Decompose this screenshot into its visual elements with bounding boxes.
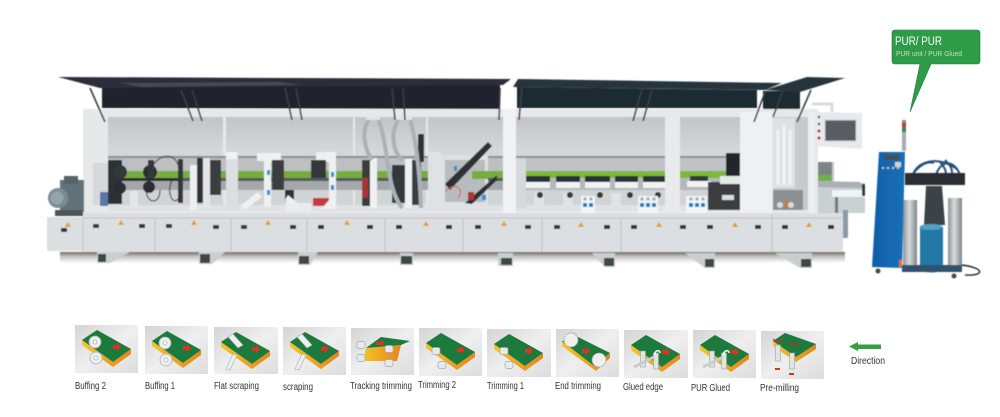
- process step: Glued edge: Glued edge: [623, 382, 663, 393]
- direction label: Direction: [851, 355, 885, 367]
- interior section 7: [773, 117, 808, 210]
- hoses: [908, 160, 960, 185]
- unit: flat scraping stations: [226, 152, 336, 212]
- cabinet base left block: [47, 217, 83, 251]
- callout title: PUR/ PUR: [895, 36, 942, 48]
- pillar centre: [665, 116, 680, 212]
- blue control cabinet: [872, 152, 905, 268]
- air gauge box 3: [686, 196, 707, 213]
- interior section 5: [516, 117, 665, 210]
- process step: Tracking trimming: Tracking trimming: [350, 381, 412, 392]
- process step: Trimming 2: [418, 328, 482, 391]
- right guard: [843, 210, 848, 238]
- process step: Buffing 1: [145, 326, 208, 392]
- process step: Pre-milling: Pre-milling: [760, 383, 799, 394]
- lid gas struts: [90, 87, 811, 122]
- process step: PUR Glued: [691, 330, 756, 394]
- right pillar: [808, 112, 815, 215]
- unit: trimming module row: [516, 158, 667, 208]
- warning triangles: [65, 220, 812, 227]
- machine feet: [97, 252, 812, 268]
- air gauge box 1: [581, 196, 595, 213]
- rear feed unit: [813, 162, 865, 215]
- base frame: [902, 265, 962, 272]
- process step: scraping: scraping: [283, 382, 313, 393]
- unit: trimming carriage: [428, 142, 497, 210]
- air gauge box 2: [638, 196, 658, 213]
- conveyor band: [108, 156, 742, 211]
- direction arrow: [849, 342, 881, 351]
- process step: scraping: [283, 327, 346, 393]
- process step: Glued edge: [623, 330, 688, 393]
- base door seams: [83, 215, 843, 252]
- unit: end trimming: [687, 152, 746, 210]
- process step: Trimming 2: Trimming 2: [418, 380, 456, 391]
- unit: tracking trimming with dust hoses: [362, 116, 424, 208]
- process step: End trimming: End trimming: [555, 381, 601, 392]
- press column: [924, 186, 945, 225]
- process step: Pre-milling: [760, 331, 824, 394]
- unit: buffing stations: [93, 156, 221, 210]
- process step: Buffing 1: Buffing 1: [145, 381, 175, 392]
- process step: End trimming: [555, 329, 619, 392]
- callout subtitle: PUR unit / PUR Glued: [896, 51, 962, 58]
- interior section 6: [680, 117, 742, 210]
- interior section 3: [355, 117, 426, 210]
- process step: Trimming 1: Trimming 1: [487, 381, 524, 392]
- lid: right cover: [763, 77, 845, 110]
- process step: Trimming 1: [487, 329, 551, 392]
- process step: Flat scraping: [214, 327, 278, 392]
- left cylinder: [903, 200, 917, 266]
- PUR glue unit: [872, 120, 980, 278]
- machine: edge banding line: [47, 77, 865, 268]
- cabinet base: [83, 213, 843, 252]
- motor: [48, 176, 84, 216]
- drum: [920, 224, 943, 272]
- lid: left cover: [58, 77, 511, 109]
- handles: [61, 224, 834, 232]
- interior section 4: [428, 117, 503, 210]
- process step: Tracking trimming: [350, 328, 414, 392]
- hoses and drive section: [773, 118, 803, 210]
- pillar right: [740, 112, 772, 215]
- interior section 2: [226, 117, 353, 210]
- signal tower: [902, 120, 906, 151]
- control panel: [815, 112, 862, 149]
- process step: Flat scraping: Flat scraping: [214, 381, 259, 392]
- right cylinder: [948, 198, 962, 272]
- callout: PUR / PUR: [892, 30, 980, 112]
- crossbar: [905, 173, 965, 185]
- control panel bracket: [812, 104, 832, 112]
- pillar between lids: [503, 109, 516, 213]
- process step: Buffing 2: Buffing 2: [75, 381, 106, 392]
- interior section 1: [108, 117, 223, 210]
- process step: Buffing 2: [75, 325, 138, 392]
- wheels and cable: [876, 265, 980, 278]
- floor shadow: [60, 252, 845, 263]
- machine body frame: [83, 109, 818, 215]
- lid: middle cover: [513, 79, 782, 108]
- process step: PUR Glued: PUR Glued: [691, 383, 730, 394]
